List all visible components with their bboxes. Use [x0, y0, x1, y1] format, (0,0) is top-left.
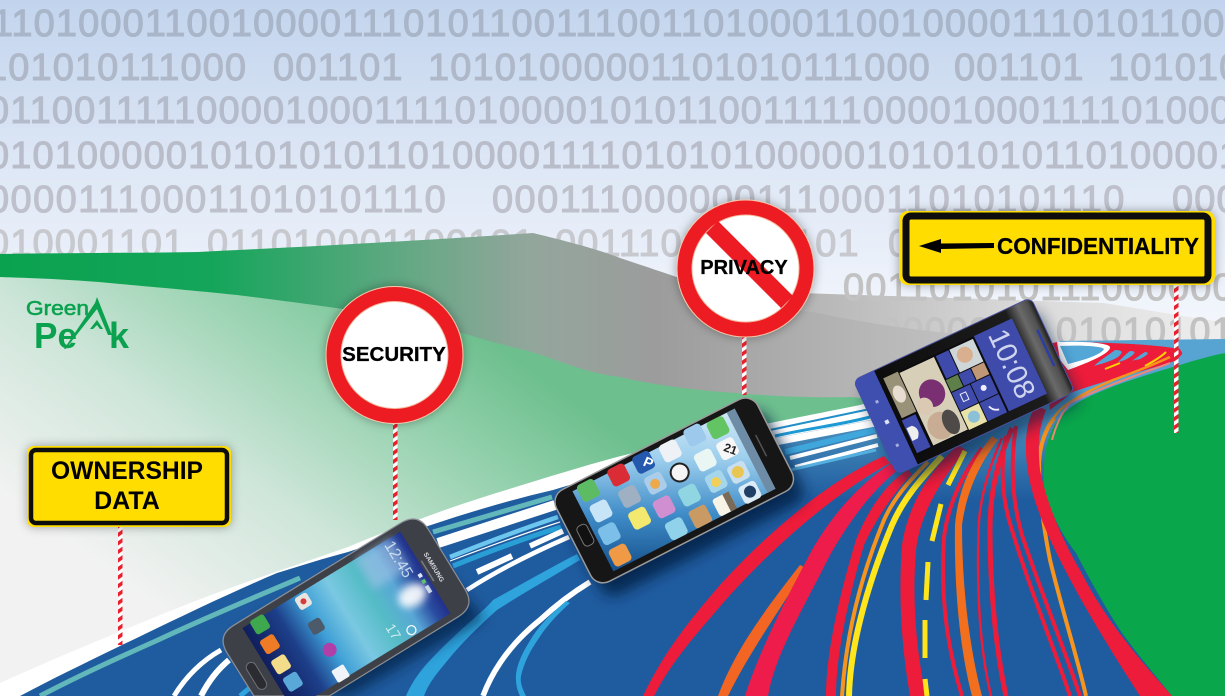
light blue horizon patch [1060, 339, 1225, 420]
green hill right [1043, 353, 1225, 696]
trails converging at horizon [1043, 342, 1182, 440]
binary digits background: 000011100011010101110 [0, 179, 447, 221]
clock text: 12:45 [380, 538, 416, 581]
speaker [421, 560, 435, 582]
arrow [919, 239, 994, 253]
binary digits background: 011010001100101 [207, 223, 535, 265]
red orange and yellow traffic trails [643, 405, 1172, 696]
trail red 1 [643, 456, 890, 696]
trail orange 2 [842, 462, 928, 696]
light green field [0, 270, 900, 696]
binary digits background [0, 3, 1225, 353]
binary digits background: 00011100000011100011010101110 [492, 179, 1126, 221]
sign: ownership data [27, 446, 231, 645]
red trail mass [1045, 342, 1182, 410]
logo: Green Peak [26, 297, 130, 356]
phone body [223, 519, 469, 696]
trail red 5 [943, 448, 982, 696]
phone shadow [560, 406, 808, 601]
binary digits background: 001101 [954, 47, 1085, 89]
road surface [20, 344, 1178, 696]
sign text: SECURITY [342, 343, 446, 366]
blue end cap [853, 371, 918, 475]
sign pole [1174, 283, 1178, 433]
phone screen [242, 532, 450, 696]
centre dashes [925, 451, 965, 696]
trail red 2 [745, 458, 906, 696]
sign plate [899, 211, 1215, 285]
binary digits background: 10101000001101010111000 [428, 47, 931, 89]
temperature: 17 [383, 621, 404, 643]
sign disc [677, 200, 814, 337]
status bar icons [417, 573, 432, 594]
logo: Green Peak: k [109, 315, 130, 356]
sign pole [393, 420, 398, 520]
sign plate [27, 446, 231, 527]
binary digits background: 001101 [273, 47, 404, 89]
binary digits background: 0011100 [555, 223, 705, 265]
phone 3: Windows phone [853, 297, 1082, 487]
sign text: PRIVACY [700, 257, 788, 279]
white loop [1057, 342, 1110, 370]
prohibition bar [712, 227, 787, 302]
sun icon [405, 624, 418, 636]
phone shadow [860, 309, 1082, 487]
sign pole [118, 526, 122, 645]
binary digits background: 0 [888, 223, 910, 265]
yellow streaks [1105, 352, 1166, 369]
phone screen [572, 409, 776, 571]
binary digits background: 101 [793, 223, 860, 265]
sign: ownership data: DATA [94, 487, 160, 515]
home button [575, 523, 595, 547]
salmon outer trail [1052, 363, 1170, 440]
trail orange 1 [718, 565, 806, 696]
road white verge [0, 345, 1090, 696]
calendar date: 21 [722, 440, 740, 458]
phone body [550, 393, 798, 588]
road lane markings between phones [760, 409, 878, 470]
vanishing point [1173, 348, 1181, 356]
trail yellow [849, 456, 942, 696]
photo tiles [882, 337, 1007, 454]
phone 2: iPhone [550, 393, 808, 601]
binary digits background: 000000 [880, 311, 1013, 353]
trail red 4 [900, 445, 966, 696]
road [0, 344, 1178, 696]
trail red 3 [826, 470, 912, 696]
pale grey distant hill band [800, 293, 1225, 360]
clock text: 10:08 [981, 324, 1041, 404]
phone screen [882, 319, 1046, 454]
speaker [755, 435, 767, 457]
logo: Green Peak: Pe [34, 315, 77, 356]
trail red 9 [1013, 426, 1080, 696]
blue lobes [1060, 346, 1104, 364]
orange outer trail [1043, 357, 1170, 440]
status bar [727, 409, 776, 493]
sky background [0, 0, 1225, 350]
logo: Green Peak: Green [26, 298, 89, 320]
binary digits background: 001101010111000000 [843, 267, 1225, 309]
brand text: SAMSUNG [422, 551, 445, 583]
sign text: CONFIDENTIALITY [997, 233, 1199, 259]
screen sky panel [355, 537, 410, 590]
sign: privacy [677, 200, 814, 395]
app icons [574, 411, 763, 570]
phone 1: Samsung [223, 519, 484, 696]
wide light blue lane [406, 554, 580, 696]
road lane markings left [40, 497, 590, 696]
phone body [853, 297, 1075, 475]
trail red wide [1026, 405, 1172, 696]
trail red 6 [978, 438, 1002, 696]
icon letter: P [641, 453, 656, 472]
trail orange 3 [955, 436, 998, 696]
app icons [247, 588, 355, 696]
trail red 7 [990, 428, 1012, 696]
earpiece [1036, 329, 1055, 367]
sign disc [326, 286, 463, 424]
screen glow [394, 578, 431, 613]
phone shadow [236, 535, 484, 696]
green to grey hill [0, 233, 1060, 420]
home button [244, 660, 269, 691]
trail orange 4 [1039, 418, 1086, 696]
trail red 8 [1003, 436, 1070, 696]
clock tile [974, 318, 1047, 411]
sign pole [742, 335, 746, 395]
sign text: OWNERSHIP [51, 457, 203, 485]
sign: security [326, 286, 463, 520]
sign: confidentiality [899, 211, 1215, 433]
